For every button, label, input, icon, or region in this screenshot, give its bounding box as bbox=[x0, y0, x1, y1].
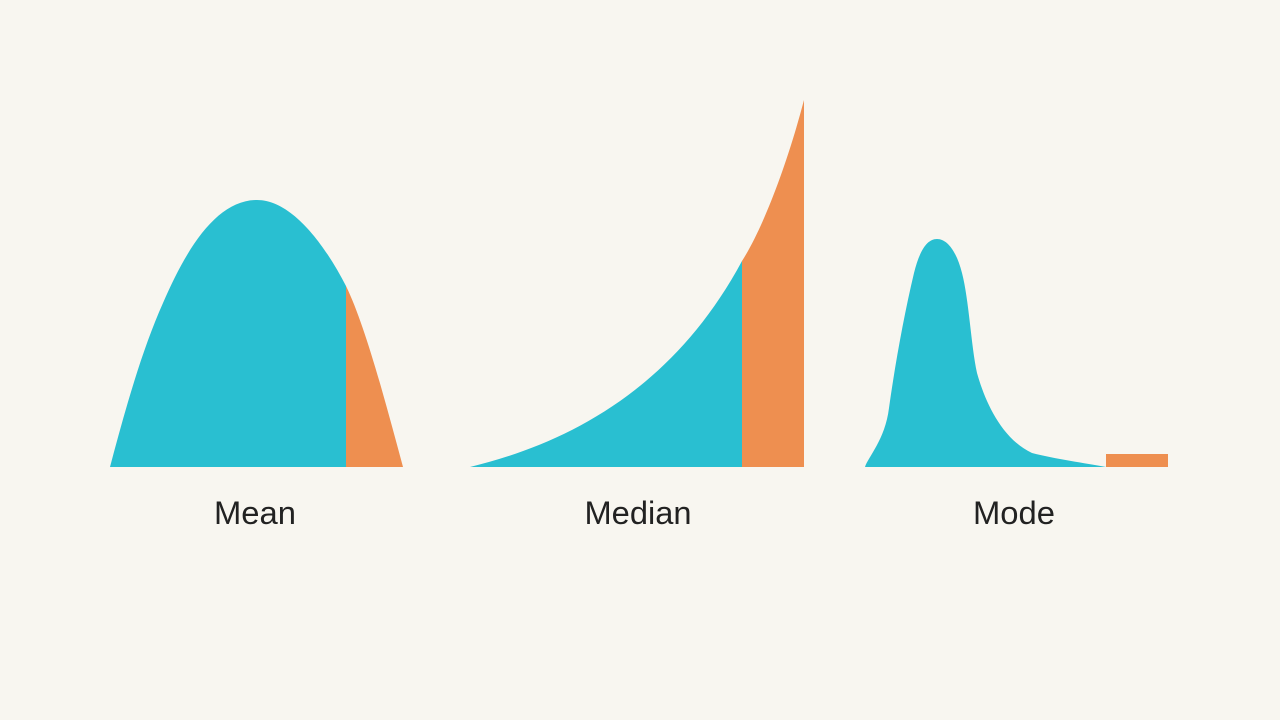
mean curve teal area bbox=[110, 200, 346, 467]
panel: mode bbox=[865, 239, 1168, 531]
mode orange bar bbox=[1106, 454, 1168, 467]
panel: mean bbox=[110, 200, 403, 531]
mode label: Mode bbox=[973, 495, 1055, 531]
median curve teal area bbox=[470, 261, 742, 467]
median label: Median bbox=[584, 495, 692, 531]
mean label: Mean bbox=[214, 495, 296, 531]
mean orange tail bbox=[346, 286, 403, 467]
mode curve teal area bbox=[865, 239, 1106, 467]
median orange tail bbox=[742, 100, 804, 467]
panel: median bbox=[470, 100, 804, 531]
